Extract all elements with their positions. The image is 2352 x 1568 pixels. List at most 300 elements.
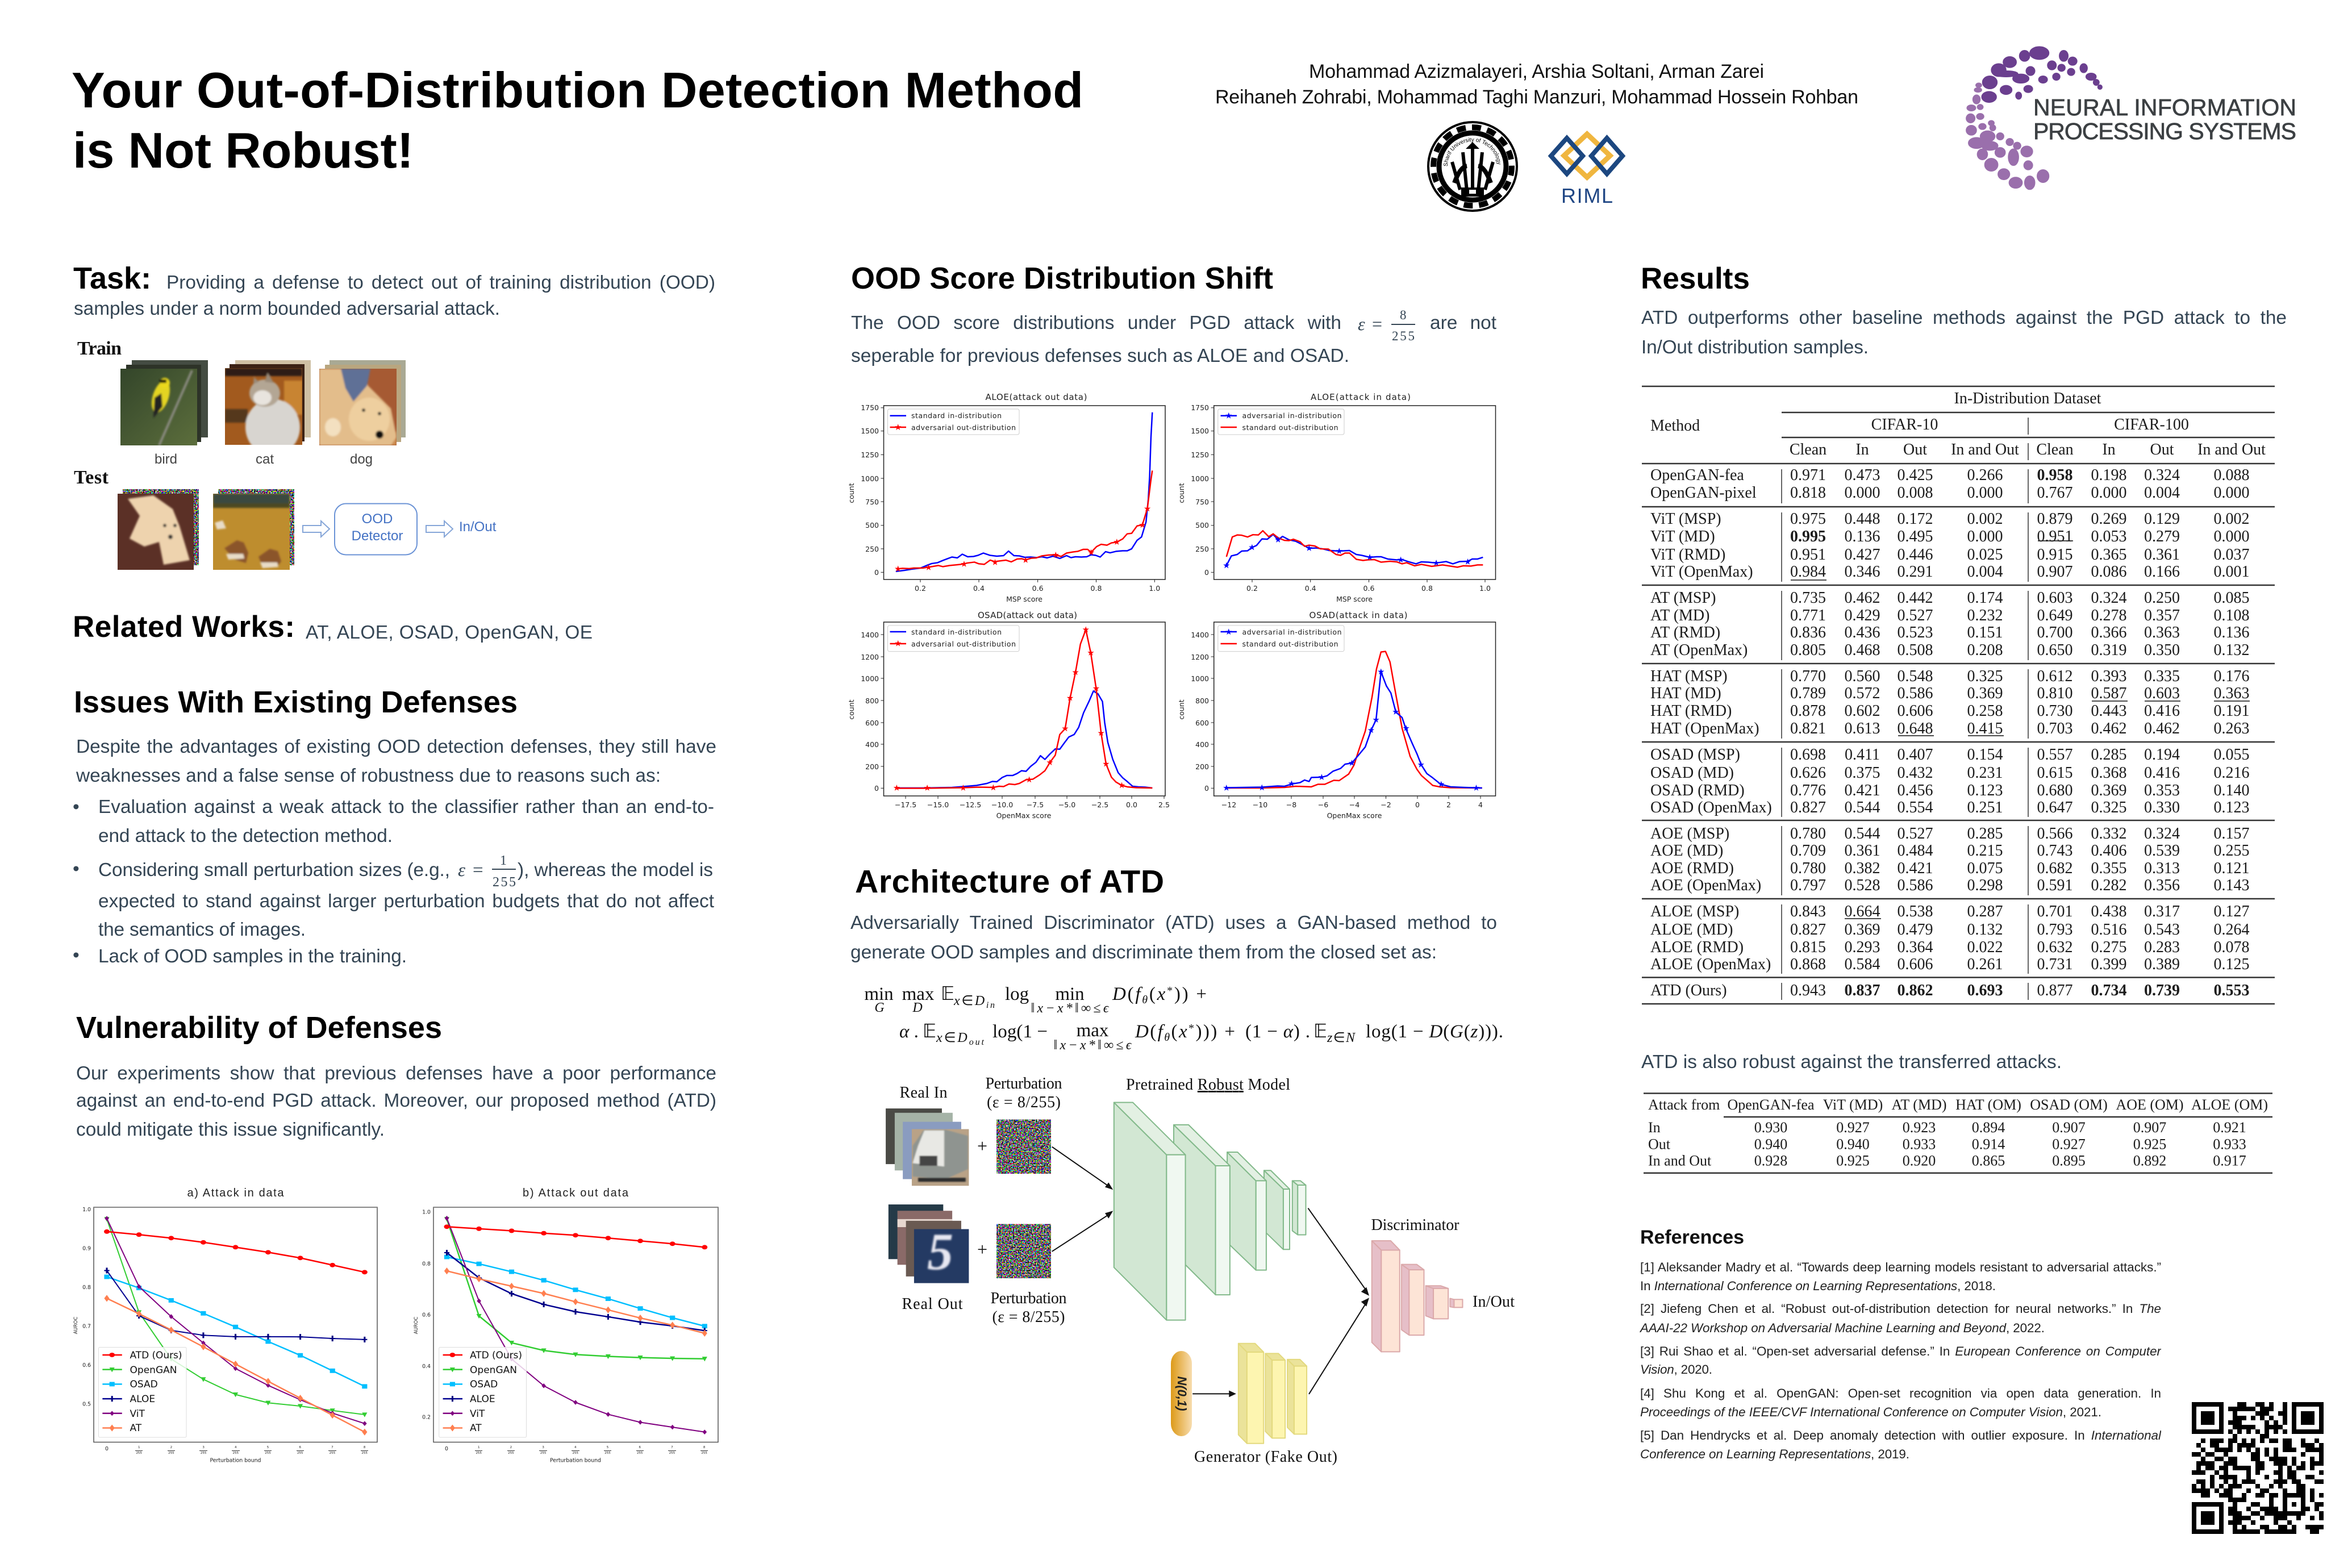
table rows: AOE: 0.566 bbox=[2037, 825, 2072, 843]
diagram labels: (ε = 8/255) bbox=[992, 1308, 1065, 1326]
table rows: ViT: ViT (MD) bbox=[1650, 528, 1715, 545]
image stack: bird bbox=[120, 360, 208, 445]
table rows: ViT: 0.446 bbox=[1898, 546, 1933, 564]
table rows: OpenGAN: 0.473 bbox=[1844, 466, 1880, 484]
line chart: b) attack out data: 0.4 bbox=[422, 1363, 431, 1370]
table rows: ALOE: 0.287 bbox=[1967, 903, 2003, 920]
table rows: AT: 0.735 bbox=[1790, 589, 1826, 607]
logo: NeurIPS: PROCESSING SYSTEMS bbox=[2033, 118, 2296, 144]
bullet: small perturbation: ε bbox=[458, 860, 465, 881]
table rows: OpenGAN: 0.818 bbox=[1790, 484, 1826, 502]
table rows: HAT: 0.363 bbox=[2213, 685, 2250, 702]
line chart: b) attack out data: 255 bbox=[508, 1452, 514, 1455]
table header: Method bbox=[1650, 417, 1700, 435]
table rows: HAT: 0.789 bbox=[1790, 685, 1826, 702]
table rows: AOE: 0.255 bbox=[2213, 842, 2250, 860]
chart: OSAD attack in data: 1400 bbox=[1191, 631, 1209, 639]
transferred attacks table: 0.892 bbox=[2133, 1152, 2166, 1169]
transferred attacks table: 0.895 bbox=[2052, 1152, 2086, 1169]
table rows: OpenGAN: 0.008 bbox=[1898, 484, 1933, 502]
table rows: OSAD: 0.554 bbox=[1898, 799, 1933, 816]
line chart: b) attack out data: 5 bbox=[607, 1446, 609, 1449]
table rows: ViT: 0.975 bbox=[1790, 510, 1826, 528]
line chart: b) attack out data: 0.8 bbox=[422, 1261, 431, 1267]
table rows: AOE: 0.780 bbox=[1790, 860, 1826, 877]
line chart: a) attack in data: 255 bbox=[233, 1452, 239, 1455]
table rows: ALOE: ALOE (RMD) bbox=[1650, 939, 1744, 956]
table rows: ViT: 0.907 bbox=[2037, 563, 2072, 581]
chart: ALOE attack in data: ALOE(attack in data) bbox=[1311, 392, 1411, 402]
table rows: HAT bbox=[1650, 668, 2250, 737]
line chart: a) attack in data: 2 bbox=[170, 1446, 172, 1449]
bullet: small perturbation bbox=[73, 853, 714, 940]
QR code bbox=[2192, 1404, 2324, 1532]
line chart: a) attack in data: 0.6 bbox=[82, 1362, 91, 1369]
table header: CIFAR-100 bbox=[2114, 416, 2189, 433]
transferred attacks table: Out bbox=[1648, 1136, 1671, 1152]
line chart: a) attack in data: ATD (Ours) bbox=[130, 1350, 182, 1361]
chart: ALOE attack in data: MSP score bbox=[1336, 595, 1373, 603]
OOD detector box: Detector bbox=[352, 528, 403, 544]
table rows: HAT: 0.810 bbox=[2037, 685, 2072, 702]
table rows: AT: 0.436 bbox=[1844, 624, 1880, 641]
table rows: AT: 0.649 bbox=[2037, 607, 2072, 624]
chart: OSAD attack out data: adversarial out-distribution bbox=[911, 640, 1016, 648]
architecture text bbox=[850, 912, 1497, 963]
chart: ALOE attack in data: count bbox=[1177, 483, 1186, 503]
label: test: Test bbox=[74, 467, 109, 488]
heading: issues: Issues With Existing Defenses bbox=[74, 685, 518, 719]
chart: ALOE attack out data: 250 bbox=[865, 545, 879, 553]
transferred attacks table: 0.930 bbox=[1754, 1119, 1787, 1136]
table rows: ALOE: 0.399 bbox=[2091, 956, 2127, 973]
table rows: ALOE: 0.664 bbox=[1844, 903, 1880, 920]
table header: In and Out bbox=[2197, 441, 2266, 458]
formula: 𝔼 bbox=[941, 984, 954, 1004]
line chart: a) attack in data: 0 bbox=[105, 1446, 109, 1452]
table rows: AOE: AOE (MD) bbox=[1650, 842, 1723, 860]
chart: ALOE attack out data: 1250 bbox=[861, 451, 879, 459]
chart: ALOE attack in data: 500 bbox=[1195, 521, 1209, 529]
table rows: AOE: 0.282 bbox=[2091, 877, 2127, 894]
table rows: AOE: 0.544 bbox=[1844, 825, 1880, 843]
chart: OSAD attack in data: adversarial in-distribution bbox=[1242, 628, 1342, 636]
line chart: a) attack in data: 8 bbox=[364, 1446, 366, 1449]
line chart: a) attack in data: 255 bbox=[297, 1452, 303, 1455]
line chart: a) attack in data: AUROC bbox=[73, 1317, 79, 1334]
title: Your Out-of-Distribution Detection Method bbox=[72, 62, 1083, 118]
line chart: b) attack out data: 0 bbox=[445, 1446, 448, 1452]
authors: Reihaneh Zohrabi, Mohammad Taghi Manzuri, Mohammad Hossein Rohban bbox=[1215, 86, 1858, 108]
table rows: OpenGAN bbox=[1650, 466, 2250, 502]
table rows: OSAD: OSAD (MSP) bbox=[1650, 746, 1740, 764]
table header: In-Distribution Dataset bbox=[1954, 390, 2101, 407]
chart: OSAD attack out data: standard in-distribution bbox=[911, 628, 1002, 636]
table rows: HAT: 0.443 bbox=[2091, 702, 2127, 720]
line chart: b) attack out data: 255 bbox=[701, 1452, 707, 1455]
logo: Sharif University of Technology bbox=[1427, 121, 1518, 212]
table rows: HAT: 0.878 bbox=[1790, 702, 1826, 720]
chart: ALOE attack out data bbox=[847, 392, 1165, 603]
chart: OSAD attack in data: 4 bbox=[1478, 800, 1483, 809]
formula: min bbox=[864, 984, 894, 1004]
table rows: OSAD: OSAD (MD) bbox=[1650, 764, 1734, 782]
chart: OSAD attack out data: −15.0 bbox=[927, 800, 949, 809]
logo: RIML bbox=[1551, 134, 1623, 207]
chart: OSAD attack out data: −12.5 bbox=[960, 800, 981, 809]
chart: ALOE attack in data: 0.6 bbox=[1363, 584, 1374, 593]
table rows: AOE: 0.324 bbox=[2144, 825, 2180, 843]
diagram labels: Generator (Fake Out) bbox=[1194, 1448, 1337, 1466]
table rows: HAT: 0.612 bbox=[2037, 668, 2072, 685]
diagram labels: Discriminator bbox=[1371, 1216, 1459, 1234]
table rows: HAT: 0.335 bbox=[2144, 668, 2180, 685]
table rows: AT: 0.836 bbox=[1790, 624, 1826, 641]
formula: in bbox=[986, 1000, 995, 1010]
chart: ALOE attack out data: 500 bbox=[865, 521, 879, 529]
table row: ATD ours: 0.837 bbox=[1844, 982, 1880, 999]
table rows: AOE: 0.215 bbox=[1967, 842, 2003, 860]
formula: x bbox=[1178, 1021, 1187, 1042]
line chart: b) attack out data: 1.0 bbox=[422, 1209, 431, 1216]
chart: ALOE attack in data: 1.0 bbox=[1479, 584, 1491, 593]
line chart: b) attack out data: 1 bbox=[478, 1446, 479, 1449]
table rows: ViT: 0.427 bbox=[1844, 546, 1880, 564]
transferred attacks table: 0.907 bbox=[2052, 1119, 2086, 1136]
table rows: ALOE: 0.543 bbox=[2144, 921, 2180, 939]
table header: In bbox=[2102, 441, 2116, 458]
table rows: OSAD: 0.330 bbox=[2144, 799, 2180, 816]
chart: ALOE attack in data bbox=[1177, 392, 1495, 603]
table rows: ViT: 0.136 bbox=[1844, 528, 1880, 545]
reference 2 bbox=[1639, 1300, 2161, 1335]
line chart: b) attack out data: 255 bbox=[604, 1452, 611, 1455]
chart: OSAD attack out data: −10.0 bbox=[991, 800, 1013, 809]
table rows: HAT: 0.606 bbox=[1898, 702, 1933, 720]
transferred attacks table: 0.921 bbox=[2213, 1119, 2246, 1136]
table rows: HAT: 0.603 bbox=[2144, 685, 2180, 702]
table rows: OSAD: 0.544 bbox=[1844, 799, 1880, 816]
line chart: b) attack out data: 6 bbox=[639, 1446, 641, 1449]
table rows: ViT: 0.037 bbox=[2213, 546, 2250, 564]
table header: Clean bbox=[1790, 441, 1826, 458]
line chart: a) attack in data: 0.7 bbox=[82, 1324, 91, 1329]
table rows: OSAD: 0.055 bbox=[2213, 746, 2250, 764]
table rows: OSAD: 0.626 bbox=[1790, 764, 1826, 782]
chart: ALOE attack in data: adversarial in-distribution bbox=[1242, 411, 1342, 420]
table rows: ALOE: 0.364 bbox=[1898, 939, 1933, 956]
table rows: AT: AT (MSP) bbox=[1650, 589, 1716, 607]
table rows: ALOE: 0.516 bbox=[2091, 921, 2127, 939]
chart: ALOE attack out data: 1000 bbox=[861, 474, 879, 483]
line chart: a) attack in data: 5 bbox=[267, 1446, 269, 1449]
table row: ATD ours: 0.739 bbox=[2144, 982, 2180, 999]
reference 3: [3] Rui Shao et al. “Open-set adversarial defense.” In European Conference on Computer bbox=[1640, 1344, 2161, 1358]
table rows: OSAD: 0.615 bbox=[2037, 764, 2072, 782]
diagram labels: Perturbation bbox=[985, 1075, 1062, 1092]
table rows: AT: 0.357 bbox=[2144, 607, 2180, 624]
table rows: ViT: 0.279 bbox=[2144, 528, 2180, 545]
table rows: AT: 0.174 bbox=[1967, 589, 2003, 607]
bullet: small perturbation: the semantics of images. bbox=[98, 919, 306, 940]
transferred attacks table: HAT (OM) bbox=[1955, 1096, 2021, 1113]
transferred attacks table: 0.917 bbox=[2213, 1152, 2246, 1169]
table rows: AT: 0.508 bbox=[1898, 641, 1933, 659]
table row: ATD ours: 0.877 bbox=[2037, 982, 2072, 999]
panel: task bbox=[73, 261, 715, 570]
OOD score text with epsilon fraction: 255 bbox=[1392, 329, 1415, 343]
reference 3: Vision, 2020. bbox=[1640, 1362, 1712, 1377]
image stack: test dog bbox=[118, 489, 199, 570]
authors: Mohammad Azizmalayeri, Arshia Soltani, Arman Zarei bbox=[1309, 61, 1764, 82]
line chart: b) attack out data: 8 bbox=[703, 1446, 706, 1449]
reference 5 bbox=[1640, 1427, 2161, 1461]
chart: OSAD attack out data: 600 bbox=[865, 719, 879, 727]
table rows: HAT: 0.703 bbox=[2037, 720, 2072, 737]
table rows: AOE: 0.382 bbox=[1844, 860, 1880, 877]
diagram: ATD architecture bbox=[886, 1075, 1515, 1466]
table rows: AOE: 0.780 bbox=[1790, 825, 1826, 843]
chart: OSAD attack out data: −5.0 bbox=[1058, 800, 1075, 809]
table rows: AT: 0.278 bbox=[2091, 607, 2127, 624]
table rows: OSAD: 0.154 bbox=[1967, 746, 2003, 764]
table rows: OSAD: 0.194 bbox=[2144, 746, 2180, 764]
table rows: OSAD: 0.123 bbox=[1967, 782, 2003, 799]
image stack: real in bbox=[886, 1108, 969, 1186]
formula: ( bbox=[1149, 984, 1156, 1004]
table rows: HAT: 0.613 bbox=[1844, 720, 1880, 737]
noise image bottom bbox=[996, 1224, 1051, 1278]
table rows: OSAD: 0.776 bbox=[1790, 782, 1826, 799]
table header: In and Out bbox=[1951, 441, 2019, 458]
formula: )) + bbox=[1174, 984, 1207, 1004]
image stack: test gazelles bbox=[213, 489, 294, 570]
table rows: AOE: 0.682 bbox=[2037, 860, 2072, 877]
formula: log(1 − D(G(z))). bbox=[1366, 1021, 1503, 1042]
table rows: ViT: 0.361 bbox=[2144, 546, 2180, 564]
bullet: weak attack: • bbox=[73, 796, 80, 818]
OOD score text with epsilon fraction: The OOD score distributions under PGD attack with bbox=[851, 312, 1341, 333]
table rows: ALOE: 0.317 bbox=[2144, 903, 2180, 920]
reference 3 bbox=[1640, 1343, 2161, 1377]
table rows: ViT: 0.166 bbox=[2144, 563, 2180, 581]
table rows: AOE: 0.709 bbox=[1790, 842, 1826, 860]
chart: OSAD attack out data: OSAD(attack out data) bbox=[978, 610, 1077, 620]
line chart: a) attack in data: 0.8 bbox=[82, 1285, 91, 1291]
table rows: ViT: ViT (OpenMax) bbox=[1650, 563, 1753, 581]
table rows: AT: 0.250 bbox=[2144, 589, 2180, 607]
transferred attacks table: AT (MD) bbox=[1891, 1096, 1947, 1113]
table rows: AOE: 0.421 bbox=[1898, 860, 1933, 877]
table rows: HAT: 0.415 bbox=[1967, 720, 2003, 737]
table rows: ViT: 0.269 bbox=[2091, 510, 2127, 528]
table rows: HAT: 0.572 bbox=[1844, 685, 1880, 702]
table rows: AOE: 0.356 bbox=[2144, 877, 2180, 894]
table row: ATD ours: 0.693 bbox=[1967, 982, 2003, 999]
line chart: b) attack out data: ViT bbox=[470, 1408, 485, 1420]
table rows: ALOE: 0.022 bbox=[1967, 939, 2003, 956]
diagram labels bbox=[900, 1075, 1515, 1466]
table header: In bbox=[1855, 441, 1869, 458]
chart: OSAD attack in data bbox=[1177, 610, 1495, 820]
table rows: AT: 0.442 bbox=[1898, 589, 1933, 607]
bullet: weak attack bbox=[73, 796, 714, 846]
line chart: b) attack out data: 4 bbox=[574, 1446, 577, 1449]
panel: related works bbox=[73, 610, 593, 644]
chart: ALOE attack in data: 750 bbox=[1195, 498, 1209, 506]
table rows: AT: 0.429 bbox=[1844, 607, 1880, 624]
table rows: AOE: AOE (RMD) bbox=[1650, 860, 1734, 877]
table rows: AT: 0.700 bbox=[2037, 624, 2072, 641]
line chart: a) attack in data: 255 bbox=[330, 1452, 336, 1455]
table rows: HAT: 0.560 bbox=[1844, 668, 1880, 685]
line chart: a) attack in data: 7 bbox=[331, 1446, 333, 1449]
table rows: OSAD: 0.375 bbox=[1844, 764, 1880, 782]
table row: ATD ours: 0.943 bbox=[1790, 982, 1826, 999]
formula: log(1 − bbox=[992, 1021, 1048, 1042]
table rows: ALOE: 0.127 bbox=[2213, 903, 2250, 920]
table rows: ALOE: 0.125 bbox=[2213, 956, 2250, 973]
table rows: AT: 0.462 bbox=[1844, 589, 1880, 607]
table rows: OSAD: 0.827 bbox=[1790, 799, 1826, 816]
chart: OSAD attack in data: −6 bbox=[1318, 800, 1328, 809]
labels: bird cat dog: cat bbox=[256, 452, 274, 467]
table rows: AT: 0.366 bbox=[2091, 624, 2127, 641]
table rows: OSAD: 0.698 bbox=[1790, 746, 1826, 764]
OOD score text with epsilon fraction: are not bbox=[1430, 312, 1496, 333]
table rows: AT: 0.603 bbox=[2037, 589, 2072, 607]
table rows: OpenGAN: OpenGAN-pixel bbox=[1650, 484, 1757, 502]
chart: OSAD attack in data: OpenMax score bbox=[1327, 811, 1382, 820]
table rows: ViT bbox=[1650, 510, 2250, 581]
line chart: a) attack in data: 255 bbox=[201, 1452, 207, 1455]
line chart: a) attack in data: OpenGAN bbox=[130, 1365, 177, 1376]
transferred attacks table: ViT (MD) bbox=[1823, 1096, 1883, 1113]
arrows bbox=[1052, 1147, 1369, 1397]
table rows: AT: 0.805 bbox=[1790, 641, 1826, 659]
table rows: ViT: 0.448 bbox=[1844, 510, 1880, 528]
formula: ‖x−x*‖∞≤ϵ bbox=[1031, 1001, 1110, 1016]
table row: ATD ours: 0.553 bbox=[2213, 982, 2250, 999]
image stack: real out bbox=[889, 1204, 969, 1283]
chart: OSAD attack out data: −17.5 bbox=[895, 800, 916, 809]
line chart: a) attack in data: 255 bbox=[136, 1452, 142, 1455]
chart: ALOE attack out data: 1750 bbox=[861, 403, 879, 412]
table rows: OSAD: 0.416 bbox=[2144, 764, 2180, 782]
reference 4: [4] Shu Kong et al. OpenGAN: Open-set recognition via open data generation. In bbox=[1640, 1386, 2161, 1400]
table rows: AOE: AOE (OpenMax) bbox=[1650, 877, 1761, 894]
table rows: OSAD: 0.680 bbox=[2037, 782, 2072, 799]
table rows: ViT: 0.995 bbox=[1790, 528, 1826, 545]
table rows: ALOE: 0.132 bbox=[1967, 921, 2003, 939]
table rows: ViT: 0.000 bbox=[1967, 528, 2003, 545]
OOD score text with epsilon fraction: = bbox=[1372, 314, 1382, 334]
formula: * bbox=[1188, 1022, 1194, 1035]
noise capsule N(0,1) bbox=[1171, 1351, 1192, 1436]
chart: OSAD attack out data: OpenMax score bbox=[996, 811, 1052, 820]
transferred attacks table: Attack from bbox=[1648, 1096, 1720, 1113]
image stack: dog bbox=[319, 360, 406, 445]
transferred attacks table: 0.923 bbox=[1903, 1119, 1936, 1136]
table rows: AOE: 0.361 bbox=[1844, 842, 1880, 860]
logo: Sharif University of Technology: Sharif University of Technology bbox=[1444, 137, 1501, 166]
line chart: a) attack in data: 0.5 bbox=[82, 1401, 91, 1408]
chart: ALOE attack in data: 0.2 bbox=[1246, 584, 1258, 593]
table rows: ALOE: 0.369 bbox=[1844, 921, 1880, 939]
table rows: ViT: 0.004 bbox=[1967, 563, 2003, 581]
reference 1 bbox=[1640, 1259, 2161, 1293]
table rows: OSAD: 0.216 bbox=[2213, 764, 2250, 782]
diagram labels: Real In bbox=[900, 1084, 948, 1102]
table rows: AT: 0.523 bbox=[1898, 624, 1933, 641]
table rows: AOE: 0.332 bbox=[2091, 825, 2127, 843]
table rows: HAT: 0.258 bbox=[1967, 702, 2003, 720]
formula: θ bbox=[1164, 1031, 1170, 1044]
table rows: ALOE: 0.701 bbox=[2037, 903, 2072, 920]
chart: OSAD attack out data: 800 bbox=[865, 697, 879, 705]
chart: OSAD attack in data: 0 bbox=[1415, 800, 1420, 809]
table rows: OpenGAN: 0.004 bbox=[2144, 484, 2180, 502]
formula: D(f bbox=[1112, 984, 1141, 1004]
chart: OSAD attack out data: −7.5 bbox=[1027, 800, 1044, 809]
table rows: AOE: 0.075 bbox=[1967, 860, 2003, 877]
task description bbox=[74, 272, 715, 319]
chart: OSAD attack in data: 400 bbox=[1195, 740, 1209, 749]
formula: (1 − α) . bbox=[1245, 1021, 1310, 1042]
chart: OSAD attack in data: −8 bbox=[1286, 800, 1296, 809]
label: train: Train bbox=[77, 338, 122, 359]
diagram labels: Real Out bbox=[902, 1295, 963, 1313]
label: In/Out: In/Out bbox=[459, 519, 497, 535]
formula: max bbox=[1077, 1020, 1109, 1041]
formula: x∈D bbox=[954, 994, 985, 1008]
transferred attacks table: 0.865 bbox=[1972, 1152, 2005, 1169]
table rows: ViT: 0.365 bbox=[2091, 546, 2127, 564]
heading: OOD score distribution shift: OOD Score Distribution Shift bbox=[851, 261, 1273, 295]
transferred attacks table bbox=[1644, 1093, 2272, 1173]
line chart: a) attack in data: AT bbox=[130, 1423, 142, 1434]
formula: α . bbox=[899, 1021, 919, 1042]
table rows: ViT: 0.129 bbox=[2144, 510, 2180, 528]
chart: ALOE attack out data: 0.6 bbox=[1032, 584, 1044, 593]
chart: ALOE attack out data: ALOE(attack out data) bbox=[985, 392, 1087, 402]
line chart: b) attack out data: 255 bbox=[637, 1452, 643, 1455]
reference 2: [2] Jiefeng Chen et al. “Robust out-of-distribution detection for neural networks.” In The bbox=[1640, 1302, 2161, 1316]
table rows: HAT: 0.548 bbox=[1898, 668, 1933, 685]
table rows: OSAD: 0.421 bbox=[1844, 782, 1880, 799]
table header: Out bbox=[2150, 441, 2174, 458]
table rows: OSAD: OSAD (OpenMax) bbox=[1650, 799, 1772, 816]
table rows: HAT: 0.587 bbox=[2091, 685, 2127, 702]
chart: OSAD attack in data: 600 bbox=[1195, 719, 1209, 727]
chart: OSAD attack out data: 200 bbox=[865, 762, 879, 771]
chart: OSAD attack in data: count bbox=[1177, 699, 1186, 720]
chart: OSAD attack in data: 2 bbox=[1446, 800, 1451, 809]
table rows: HAT: 0.586 bbox=[1898, 685, 1933, 702]
table rows: HAT: 0.770 bbox=[1790, 668, 1826, 685]
heading: results: Results bbox=[1641, 262, 1750, 295]
chart: ALOE attack out data: 0 bbox=[874, 568, 879, 577]
table rows: HAT: 0.462 bbox=[2091, 720, 2127, 737]
chart: OSAD attack in data: standard out-distribution bbox=[1242, 640, 1338, 648]
table rows: ALOE: 0.584 bbox=[1844, 956, 1880, 973]
transferred attacks table: 0.925 bbox=[1836, 1152, 1870, 1169]
formula: x bbox=[1157, 984, 1166, 1004]
bullet: lack of OOD samples: Lack of OOD samples in the training. bbox=[98, 946, 407, 967]
table rows: OSAD: 0.353 bbox=[2144, 782, 2180, 799]
transferred attacks table: 0.933 bbox=[2213, 1136, 2246, 1152]
image stack: cat bbox=[225, 360, 311, 445]
